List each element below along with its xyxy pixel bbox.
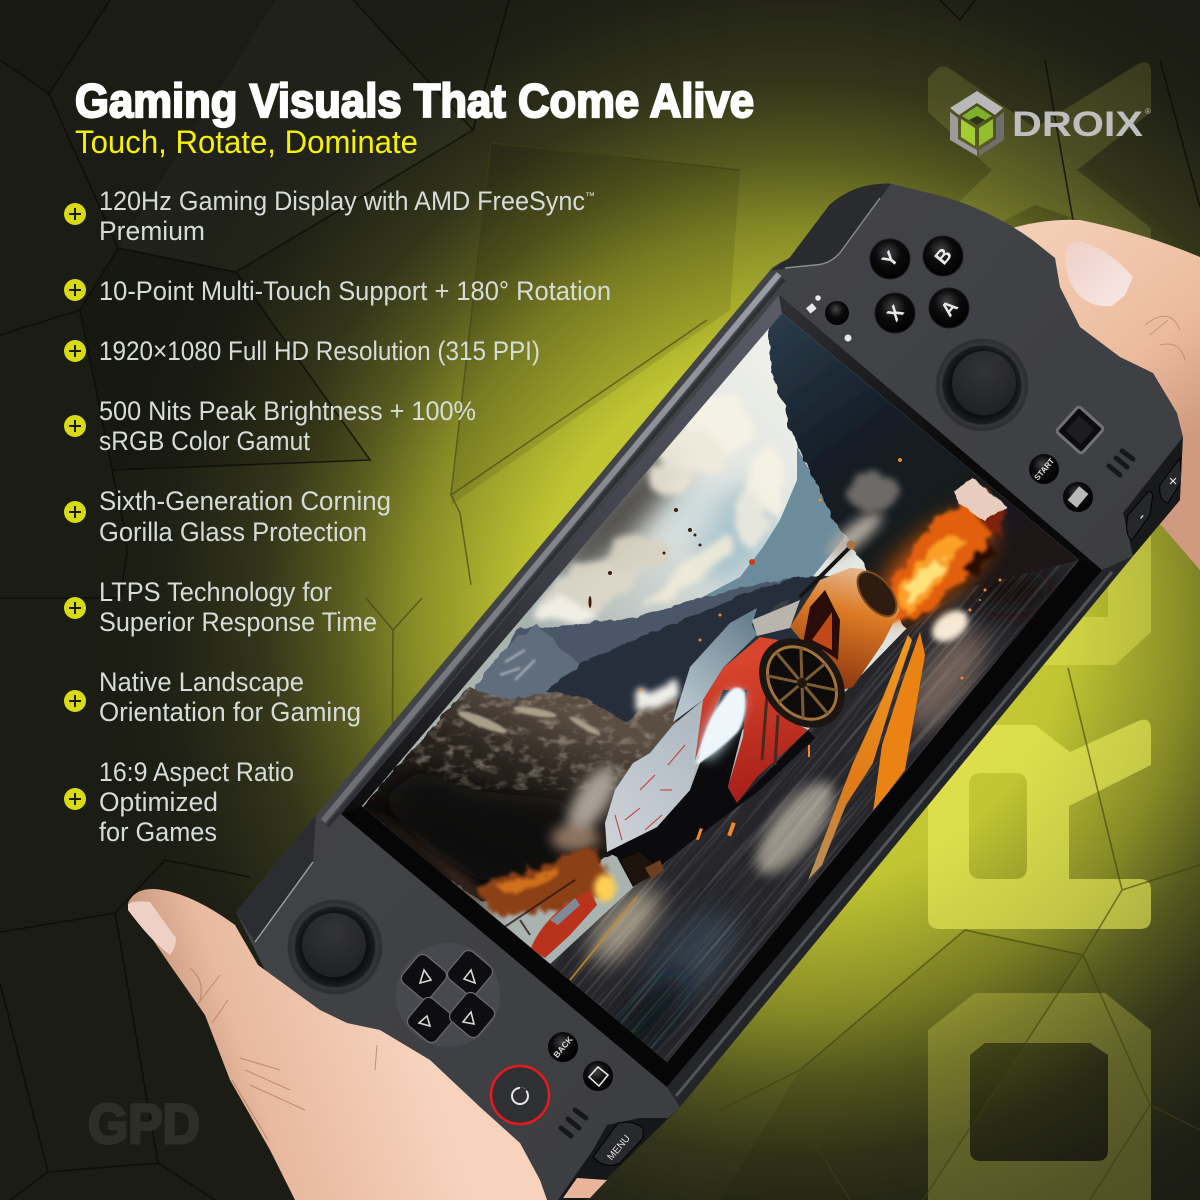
right hand behind device [1000,220,1200,570]
feature 5: Gorilla Glass Protection [99,517,367,547]
smoke plume [551,759,626,852]
car silver hood [605,690,723,852]
feature 4: 500 Nits Peak Brightness + 100% [99,396,476,426]
dark debris [588,508,702,608]
snow streaks [500,650,535,680]
car wing [800,547,850,597]
feature 4 [64,396,476,456]
blue mountain peak [697,447,845,600]
handheld console [236,184,1184,1200]
registered mark: ® [1145,107,1151,116]
car rear flame highlight [812,612,832,650]
power button [491,1066,549,1124]
feature 1: ™ [585,191,595,202]
plus button: × [1169,473,1177,490]
roof white band [752,600,800,636]
watermark: GPD: GPD [88,1092,200,1155]
thumb nail [1065,242,1133,306]
scoop accent [645,860,664,880]
left speaker [561,1110,586,1136]
feature 5: Sixth-Generation Corning [99,486,391,516]
right side bumper [1123,437,1183,556]
top shoulder highlight [785,198,880,268]
upper-left rim groove [328,279,784,826]
thumb nail [128,901,176,955]
sky blue tint [532,473,790,612]
right thumb [1020,225,1200,570]
feature 3: 1920×1080 Full HD Resolution (315 PPI) [99,336,540,366]
car rear wheel [856,570,898,618]
square touch button [1056,406,1104,454]
dust behind the car [823,505,887,565]
feature 8 [64,757,294,847]
face button Y [870,239,910,279]
near ridge [545,575,840,760]
face button A: A [937,296,963,321]
face button Y: Y [878,247,904,272]
feature 8: 16:9 Aspect Ratio [99,757,294,787]
screen bezel [341,295,1102,1087]
upper-left rim ridge [323,274,779,821]
d-pad [396,943,500,1047]
left hand [128,889,547,1200]
right analog stick [935,338,1029,432]
grey smoke [848,472,896,512]
minus button [1127,492,1152,540]
plus button [1160,458,1182,503]
feature 8: for Games [99,817,217,847]
foreground rocks [363,688,677,900]
icon: hexagon cube [950,91,1004,156]
sky [362,313,1079,1062]
feature 7: Orientation for Gaming [99,697,361,727]
face button B [923,236,963,276]
left shoulder highlight [255,862,313,942]
thumb creases [190,968,377,1140]
BACK button: BACK [551,1034,575,1060]
small car fire [594,874,616,902]
turbo marks [806,295,852,342]
headlight [696,688,746,765]
left analog stick [287,899,383,995]
home button [583,1061,613,1091]
START button: START [1033,456,1056,482]
car rear body [790,568,900,690]
lower left ground [382,818,502,924]
feature 4: sRGB Color Gamut [99,426,310,456]
BACK button [548,1032,578,1062]
minus button: - [1133,509,1150,524]
car black underside [607,727,815,887]
main fire [885,490,1005,625]
face button A [929,288,969,328]
knuckle creases [1145,316,1185,360]
lower-right rim highlight [676,572,1112,1096]
mirror [768,600,790,615]
background: faint olive creases [366,143,1200,1200]
snowy mountain [474,624,579,700]
headlight glow [694,686,750,764]
car rear window [803,590,840,660]
top shoulder grip [772,184,890,270]
feature 6 [64,577,377,637]
face button X: X [883,301,909,326]
car red specks [615,745,685,840]
feature 1 [64,186,595,246]
fire glow [863,496,1007,634]
white clouds [529,395,788,630]
road base [547,560,1079,1062]
title: Gaming Visuals That Come Alive [75,74,754,127]
background: oversized logo letters [928,62,1151,1200]
wing end cap [846,540,856,550]
face button B: B [931,244,957,269]
bezel upper-left band [341,295,782,814]
MENU button: MENU [605,1133,633,1163]
feature 1: Premium [99,216,205,246]
hand shape [128,889,547,1200]
far ridge [507,576,815,665]
car red panel [695,637,808,803]
road tones [391,378,1155,1191]
device body [236,184,1184,1200]
orange road stripes [808,635,912,880]
road white glow [928,606,972,646]
bezel top band [779,295,1102,570]
yellow road line [570,897,637,980]
rock bright ledges [456,704,602,738]
screen artwork [362,313,1079,1062]
crashed white car [953,478,1006,520]
feature 7 [64,667,361,727]
feature 1: 120Hz Gaming Display with AMD FreeSync [99,186,585,216]
rock texture [402,688,677,790]
car front scoop [620,852,662,885]
feature 6: LTPS Technology for [99,577,332,607]
bottom bumper [558,1107,680,1200]
lower fire haze [478,845,612,915]
lower-right rim [667,556,1133,1107]
keyboard button [1063,482,1093,512]
car panel dark slats [762,695,778,765]
left shoulder grip [236,815,316,942]
feature 8: Optimized [99,787,218,817]
feature 2: 10-Point Multi-Touch Support + 180° Rotation [99,276,611,306]
rock shadow [370,758,570,847]
second road stripe [873,632,925,812]
white puff cloud [631,679,679,715]
small red car [530,890,597,958]
feature 5 [64,486,391,547]
subtitle: Touch, Rotate, Dominate [75,124,418,160]
dark storm cloud [558,446,688,577]
small turbo button [825,301,849,325]
guard rails [500,880,575,935]
feature 6: Superior Response Time [99,607,377,637]
cliff and dark backdrop [768,313,1079,658]
feature 7: Native Landscape [99,667,304,697]
orange sparks [638,458,1002,840]
right speaker [1109,451,1133,475]
small car window [550,898,580,925]
MENU button [593,1122,643,1165]
START button [1029,454,1059,484]
logo: DROIX [950,91,1151,156]
car window dome [673,608,757,722]
wordmark: DROIX [1012,105,1144,144]
feature list [64,186,611,847]
finger at bottom [563,1178,607,1198]
front wheel [741,621,863,745]
face button X [875,293,915,333]
